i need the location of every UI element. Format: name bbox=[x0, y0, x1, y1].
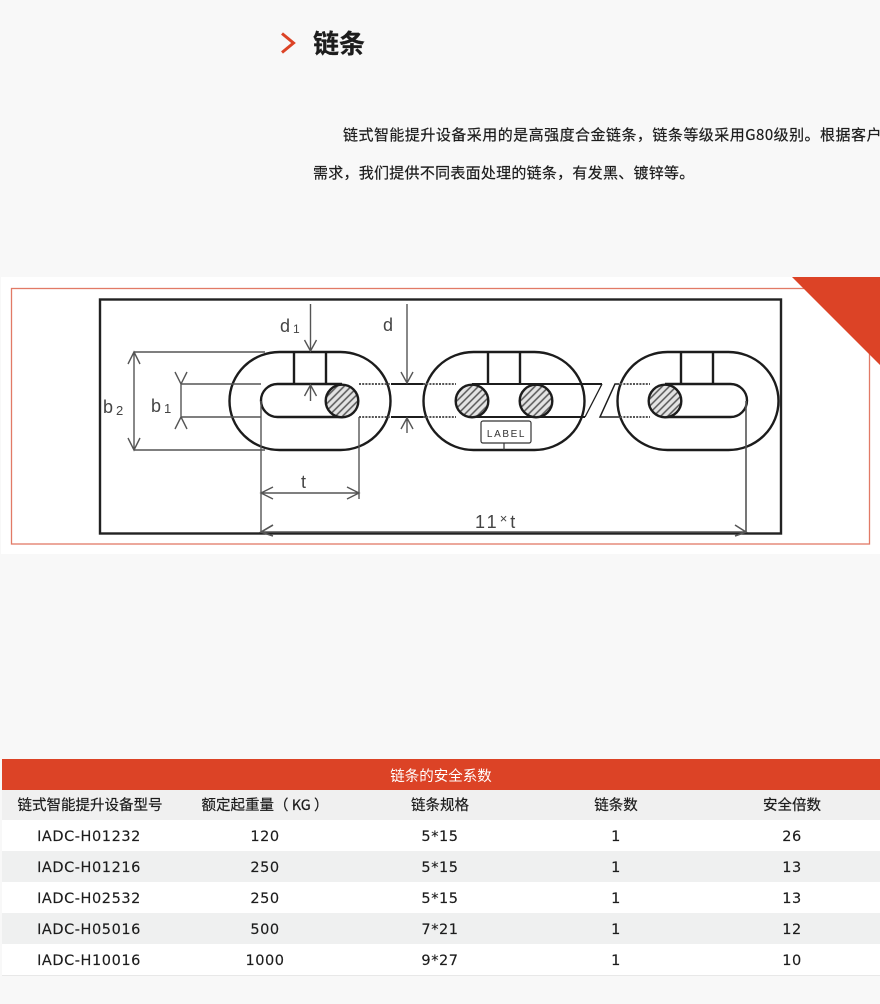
dimension labels bbox=[103, 315, 518, 532]
diagram frame bbox=[12, 288, 870, 544]
connecting link with break bbox=[359, 384, 650, 417]
table row 1: 1 bbox=[611, 829, 621, 845]
dimension labels: b bbox=[151, 396, 161, 416]
table row 3 bbox=[2, 882, 880, 913]
dimension d1 bbox=[304, 304, 316, 401]
dimension labels: 11 bbox=[475, 512, 500, 532]
table row 2: IADC-H01216 bbox=[37, 860, 141, 876]
table row 1: IADC-H01232 bbox=[37, 829, 141, 845]
table row 4: 12 bbox=[782, 922, 802, 938]
table row 2 bbox=[2, 851, 880, 882]
dimension d bbox=[401, 304, 413, 433]
table row 5: IADC-H10016 bbox=[37, 953, 141, 969]
table row 5: 1000 bbox=[245, 953, 285, 969]
dimension labels: b bbox=[103, 397, 113, 417]
dimension labels: × bbox=[500, 511, 510, 526]
table row 2: 250 bbox=[250, 860, 280, 876]
table header row: 链条规格 bbox=[411, 794, 469, 815]
section heading bbox=[281, 24, 365, 61]
table row 5: 9*27 bbox=[421, 953, 459, 969]
title text: 链条 bbox=[313, 24, 365, 61]
table row 2: 13 bbox=[782, 860, 802, 876]
table header row: 额定起重量（ KG ） bbox=[201, 794, 329, 815]
table: chain safety factors bbox=[2, 759, 880, 976]
intro paragraph: 需求，我们提供不同表面处理的链条，有发黑、镀锌等。 bbox=[313, 162, 695, 183]
table row 5 bbox=[2, 944, 880, 976]
table row 4: IADC-H05016 bbox=[37, 922, 141, 938]
dimension labels: 1 bbox=[164, 401, 171, 416]
dimension lines bbox=[128, 304, 746, 536]
table header row: 链式智能提升设备型号 bbox=[18, 794, 162, 815]
table row 1: 26 bbox=[782, 829, 802, 845]
rod sections bbox=[326, 385, 681, 417]
corner triangle bbox=[792, 277, 880, 365]
table row 1 bbox=[2, 820, 880, 851]
table row 3: 1 bbox=[611, 891, 621, 907]
table title bar bbox=[2, 759, 880, 790]
dimension b1 bbox=[175, 372, 261, 429]
table row 4: 1 bbox=[611, 922, 621, 938]
icon: chevron bbox=[281, 32, 296, 54]
table row 3: 5*15 bbox=[421, 891, 459, 907]
dimension t bbox=[261, 401, 359, 533]
dimension labels: t bbox=[510, 512, 518, 532]
table row 2: 1 bbox=[611, 860, 621, 876]
table row 4 bbox=[2, 913, 880, 944]
dimension labels: t bbox=[301, 472, 306, 492]
table title bar: 链条的安全系数 bbox=[390, 765, 492, 786]
table row 3: 13 bbox=[782, 891, 802, 907]
dimension labels: 1 bbox=[293, 322, 300, 336]
chain links bbox=[230, 352, 778, 450]
dimension labels: 2 bbox=[116, 403, 123, 418]
panel: chain diagram bbox=[1, 277, 880, 554]
drawing border bbox=[100, 300, 781, 534]
label tag bbox=[481, 421, 531, 450]
table row 1: 5*15 bbox=[421, 829, 459, 845]
table row 2: 5*15 bbox=[421, 860, 459, 876]
table header row bbox=[2, 790, 880, 820]
table row 4: 500 bbox=[250, 922, 280, 938]
table row 4: 7*21 bbox=[421, 922, 459, 938]
table row 3: 250 bbox=[250, 891, 280, 907]
table row 1: 120 bbox=[250, 829, 280, 845]
link 1 bbox=[230, 352, 390, 450]
table header row: 链条数 bbox=[594, 794, 638, 815]
link 3 bbox=[618, 352, 778, 450]
table row 5: 1 bbox=[611, 953, 621, 969]
dimension b2 bbox=[128, 352, 265, 450]
table row 3: IADC-H02532 bbox=[37, 891, 141, 907]
intro paragraph bbox=[313, 125, 880, 183]
dimension labels: d bbox=[280, 316, 290, 336]
dimension 11×t bbox=[261, 401, 746, 536]
label tag: LABEL bbox=[487, 429, 526, 440]
dimension labels: d bbox=[383, 315, 393, 335]
table row 5: 10 bbox=[782, 953, 802, 969]
link 2 bbox=[424, 352, 584, 450]
table header row: 安全倍数 bbox=[763, 794, 821, 815]
